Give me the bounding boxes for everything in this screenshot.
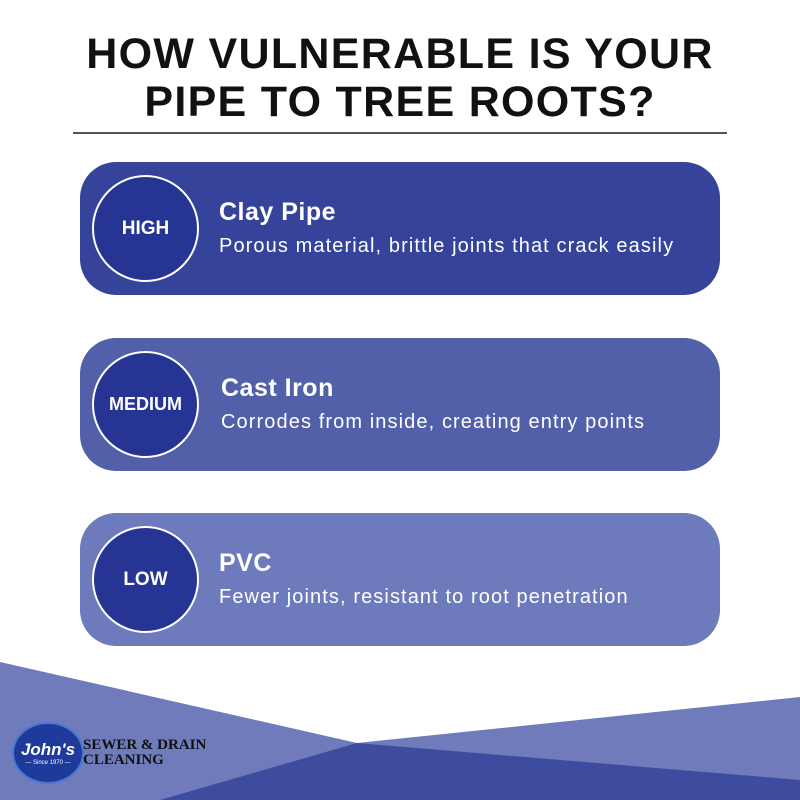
panel: high: HIGH xyxy=(122,218,169,238)
title xyxy=(86,30,714,126)
title: HOW VULNERABLE IS YOUR xyxy=(86,30,714,78)
panel: low: PVC xyxy=(219,549,272,577)
panel: high xyxy=(80,162,720,295)
panel: medium: Corrodes from inside, creating entry points xyxy=(221,411,645,433)
panel: high: Clay Pipe xyxy=(219,198,336,226)
panel: medium xyxy=(80,338,720,471)
title: PIPE TO TREE ROOTS? xyxy=(144,78,656,126)
panel: low xyxy=(80,513,720,646)
logo: SEWER & DRAIN xyxy=(83,737,206,753)
logo: John's xyxy=(21,740,75,759)
logo xyxy=(12,722,206,784)
logo: — Since 1970 — xyxy=(25,760,71,766)
panel: medium: Cast Iron xyxy=(221,374,334,402)
logo: CLEANING xyxy=(83,752,164,768)
panel: high: Porous material, brittle joints that crack easily xyxy=(219,235,674,257)
panel: low: LOW xyxy=(123,568,168,590)
panel: medium: MEDIUM xyxy=(109,394,182,414)
panel: low: Fewer joints, resistant to root penetration xyxy=(219,586,629,608)
